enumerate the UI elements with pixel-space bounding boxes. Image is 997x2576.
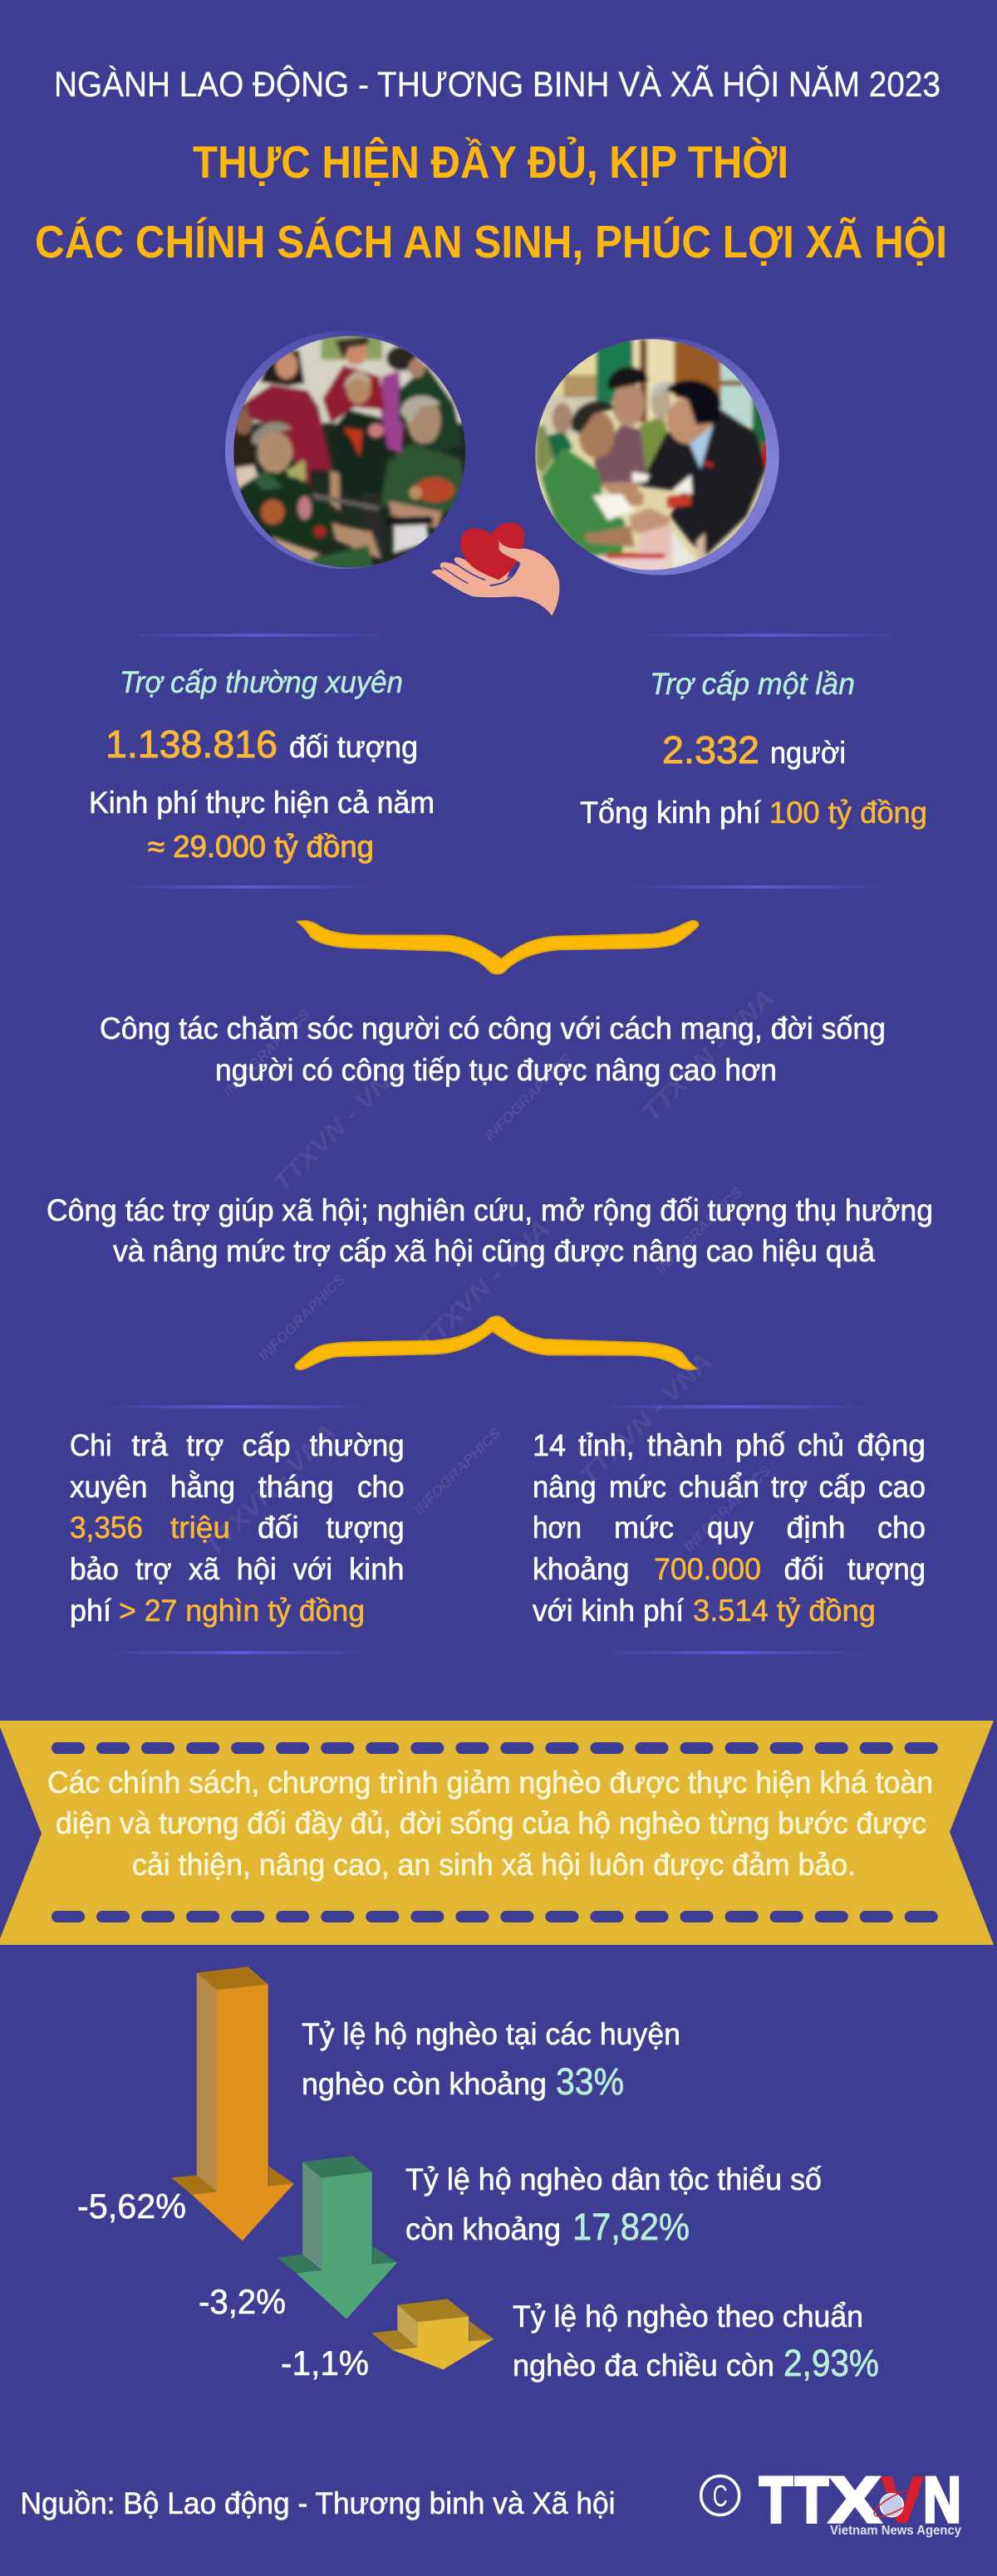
logo: TTXVN: T (795, 2463, 828, 2536)
arrow: yellow -1.1% (371, 2299, 494, 2369)
banner text (47, 1765, 933, 1882)
text: monthly allowance paragraph: trả (131, 1428, 168, 1462)
text: provinces raising allowance paragraph: mức (609, 1470, 666, 1504)
logo: TTXVN: N (923, 2463, 961, 2536)
text: monthly allowance paragraph: phí (70, 1594, 112, 1628)
banner ribbon (0, 1721, 994, 1945)
text: district poverty rate (302, 2017, 680, 2103)
text: monthly allowance paragraph: cho (357, 1470, 405, 1504)
text: monthly allowance paragraph: triệu (170, 1511, 230, 1545)
banner top stitching (52, 1742, 938, 1754)
text: provinces raising allowance paragraph: đối (784, 1552, 824, 1586)
text: Kinh phí thực hiện cả năm (89, 786, 435, 820)
text: monthly allowance paragraph: bảo (70, 1552, 119, 1586)
text: provinces raising allowance paragraph: nâng (533, 1470, 597, 1504)
label: -3,2%: -3,2% (199, 2282, 286, 2321)
watermark: INFOGRAPHICS (410, 1425, 504, 1518)
panel: regular allowance (89, 665, 435, 864)
text: provinces raising allowance paragraph: định (786, 1511, 846, 1545)
text: monthly allowance paragraph: 3,356 (70, 1511, 143, 1545)
text: monthly allowance paragraph: Chi (70, 1428, 111, 1462)
text: care for people with merit (100, 1011, 886, 1087)
text: multidimensional poverty rate: Tỷ lệ hộ nghèo theo chuẩn (513, 2299, 863, 2334)
logo: TTXVN: T (759, 2463, 793, 2536)
logo: TTXVN: V (882, 2463, 923, 2536)
watermark: INFOGRAPHICS (255, 1271, 349, 1364)
text: social assistance: Công tác trợ giúp xã hội; nghiên cứu, mở rộng đối tượng thụ hưởng (47, 1193, 933, 1227)
divider (99, 1405, 378, 1408)
panel: one-time allowance (580, 667, 927, 830)
brace pointing up (296, 1316, 696, 1369)
icon: copyright: C (713, 2479, 728, 2513)
watermark (199, 984, 779, 1561)
text: monthly allowance paragraph: trợ (186, 1428, 223, 1462)
text: multidimensional poverty rate: 2,93% (783, 2342, 879, 2384)
text: social assistance (47, 1193, 933, 1268)
divider (618, 885, 896, 889)
text: provinces raising allowance paragraph: 700.000 (654, 1552, 761, 1586)
watermark: INFOGRAPHICS (680, 1462, 774, 1555)
title (35, 65, 947, 267)
watermark: TTXVN - VNA (575, 1348, 717, 1491)
logo: TTXVN: X (829, 2463, 881, 2536)
text: provinces raising allowance paragraph: chủ (798, 1428, 844, 1462)
logo: TTXVN (759, 2463, 961, 2538)
unit: đối tượng (289, 730, 418, 764)
text: monthly allowance paragraph: đối (258, 1511, 299, 1545)
logo: TTXVN: Vietnam News Agency (830, 2524, 961, 2538)
text: provinces raising allowance paragraph: 3.514 tỷ đồng (693, 1594, 876, 1628)
text: monthly allowance paragraph: kinh (349, 1552, 405, 1586)
text: multidimensional poverty rate (513, 2299, 879, 2384)
text: provinces raising allowance paragraph: thành (647, 1428, 723, 1462)
number: 2.332 (662, 728, 759, 771)
text: ethnic minority poverty rate: còn khoảng (405, 2212, 561, 2246)
text: provinces raising allowance paragraph: chuẩn (679, 1470, 759, 1504)
divider (108, 885, 386, 889)
text: monthly allowance paragraph: thường (310, 1428, 405, 1462)
arrow: green -3.2% (277, 2156, 397, 2319)
text: provinces raising allowance paragraph: với kinh phí (533, 1594, 685, 1628)
amount: ≈ 29.000 tỷ đồng (148, 830, 374, 864)
text: monthly allowance paragraph: xã (189, 1552, 219, 1586)
text: provinces raising allowance paragraph: quy (707, 1511, 754, 1545)
divider (629, 634, 909, 637)
text: provinces raising allowance paragraph: động (857, 1428, 926, 1462)
text: provinces raising allowance paragraph: trợ (771, 1470, 808, 1504)
text: ethnic minority poverty rate: 17,82% (572, 2206, 690, 2248)
text: provinces raising allowance paragraph: cấp (819, 1470, 866, 1504)
icon: hand holding heart (431, 522, 559, 616)
watermark: TTXVN - VNA (413, 1215, 555, 1358)
text: provinces raising allowance paragraph: hơn (533, 1511, 582, 1545)
watermark: TTXVN - VNA (268, 1055, 410, 1197)
text: monthly allowance paragraph (70, 1428, 405, 1628)
divider (592, 1405, 872, 1408)
number: 1.138.816 (106, 722, 277, 766)
label: -1,1%: -1,1% (281, 2343, 369, 2383)
arrow: orange -5.62% (171, 1966, 294, 2241)
divider (592, 1651, 872, 1654)
text: monthly allowance paragraph: trợ (135, 1552, 172, 1586)
text: social assistance: và nâng mức trợ cấp xã hội cũng được nâng cao hiệu quả (113, 1234, 875, 1268)
watermark: TTXVN - VNA (637, 984, 779, 1127)
text: ethnic minority poverty rate (405, 2162, 822, 2248)
text: district poverty rate: nghèo còn khoảng (302, 2067, 547, 2101)
text: Tổng kinh phí (580, 796, 762, 830)
watermark: TTXVN - VNA (199, 1418, 341, 1561)
text: monthly allowance paragraph: hội (237, 1552, 277, 1586)
banner: poverty reduction (0, 1721, 994, 1945)
banner text: cải thiện, nâng cao, an sinh xã hội luôn được đảm bảo. (132, 1848, 856, 1882)
source: Nguồn: Bộ Lao động - Thương binh và Xã hội (20, 2486, 615, 2520)
title: headline line 1: THỰC HIỆN ĐẦY ĐỦ, KỊP THỜI (193, 136, 788, 188)
text: monthly allowance paragraph: tượng (326, 1511, 405, 1545)
text: district poverty rate: Tỷ lệ hộ nghèo tại các huyện (302, 2017, 680, 2051)
text: provinces raising allowance paragraph: mức (614, 1511, 674, 1545)
panel heading: Trợ cấp một lần (650, 667, 855, 701)
text: provinces raising allowance paragraph: 14 (533, 1428, 566, 1462)
text: monthly allowance paragraph: hằng (170, 1470, 235, 1504)
text: provinces raising allowance paragraph: phố (735, 1428, 785, 1462)
text: multidimensional poverty rate: nghèo đa chiều còn (513, 2348, 774, 2383)
text: district poverty rate: 33% (556, 2060, 624, 2103)
photo: official handing envelope to veteran (533, 336, 779, 575)
divider (99, 1651, 378, 1654)
watermark: INFOGRAPHICS (481, 1051, 575, 1144)
text: provinces raising allowance paragraph (533, 1428, 926, 1628)
divider (118, 634, 397, 637)
text: ethnic minority poverty rate: Tỷ lệ hộ nghèo dân tộc thiểu số (405, 2162, 822, 2196)
panel heading: Trợ cấp thường xuyên (120, 665, 403, 699)
text: monthly allowance paragraph: cấp (243, 1428, 291, 1462)
text: provinces raising allowance paragraph: cao (878, 1470, 926, 1504)
text: provinces raising allowance paragraph: tượng (847, 1552, 926, 1586)
text: provinces raising allowance paragraph: cho (877, 1511, 926, 1545)
text: monthly allowance paragraph: tháng (258, 1470, 334, 1504)
text: provinces raising allowance paragraph: tỉnh, (578, 1428, 635, 1462)
watermark: INFOGRAPHICS (219, 1006, 313, 1099)
unit: người (770, 736, 846, 770)
text: monthly allowance paragraph: xuyên (70, 1470, 148, 1504)
text: care for people with merit: Công tác chăm sóc người có công với cách mạng, đời sống (100, 1011, 886, 1046)
photo: veterans in wheelchairs (225, 331, 471, 573)
banner bottom stitching (52, 1911, 938, 1922)
text: care for people with merit: người có công tiếp tục được nâng cao hơn (215, 1053, 777, 1087)
icon: copyright (701, 2476, 739, 2515)
text: monthly allowance paragraph: với (293, 1552, 332, 1586)
brace pointing down (297, 921, 698, 974)
text: provinces raising allowance paragraph: khoảng (533, 1552, 630, 1586)
banner text: diện và tương đối đầy đủ, đời sống của hộ nghèo từng bước được (56, 1806, 926, 1840)
banner text: Các chính sách, chương trình giảm nghèo được thực hiện khá toàn (47, 1765, 933, 1800)
watermark: INFOGRAPHICS (652, 1184, 746, 1277)
amount: 100 tỷ đồng (769, 796, 927, 830)
label: -5,62%: -5,62% (77, 2187, 186, 2226)
text: monthly allowance paragraph: > 27 nghìn tỷ đồng (119, 1594, 365, 1628)
